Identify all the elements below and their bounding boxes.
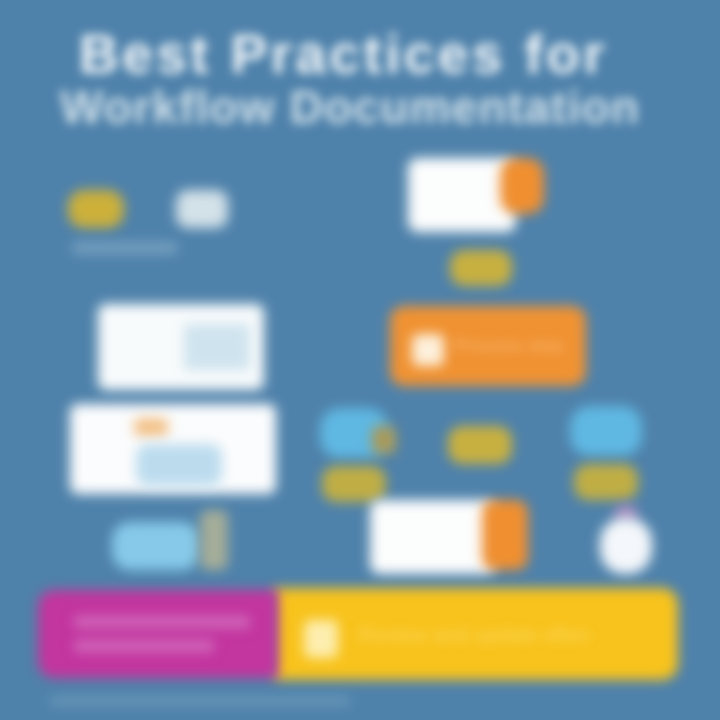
yellow label left — [68, 190, 124, 228]
card body — [98, 304, 264, 390]
icon: person — [591, 498, 661, 582]
title line 2: Workflow Documentation — [60, 81, 640, 133]
magenta text line 2 — [74, 640, 214, 652]
white card upper left — [88, 294, 274, 399]
title — [54, 23, 644, 133]
body — [600, 518, 652, 574]
orange mark — [134, 418, 168, 436]
box fill — [390, 306, 586, 386]
orange process box — [381, 297, 595, 395]
head — [614, 504, 638, 524]
lower process card — [360, 490, 537, 583]
yellow label lower left — [322, 466, 386, 502]
bubble — [112, 522, 200, 570]
yellow connector label top — [450, 250, 512, 286]
yellow panel — [274, 588, 678, 680]
blue bubble left — [320, 408, 388, 458]
figure — [200, 510, 228, 570]
orange tab — [482, 500, 528, 570]
box icon — [412, 334, 444, 366]
blue illustration — [136, 444, 222, 486]
icon: document bubble — [106, 503, 236, 577]
title line 1: Best Practices for — [79, 23, 608, 85]
yellow label lower right — [574, 464, 638, 500]
magenta panel text — [70, 610, 254, 658]
card body — [408, 158, 516, 232]
small tag left — [372, 426, 396, 454]
card tint — [184, 324, 250, 370]
white card lower left — [60, 394, 286, 504]
orange tab — [500, 158, 544, 214]
white label left — [176, 190, 228, 228]
blue bubble right — [570, 406, 642, 456]
magenta panel — [38, 590, 278, 678]
card body — [370, 500, 496, 574]
footer caption — [50, 696, 350, 706]
magenta text line 1 — [74, 616, 250, 628]
box text: Process step — [454, 336, 564, 357]
top process card — [398, 148, 553, 242]
card body — [70, 404, 276, 494]
bottom banner — [30, 578, 688, 690]
yellow panel text: Review and update often — [358, 624, 590, 647]
yellow panel icon — [304, 620, 338, 658]
caption left — [72, 242, 178, 254]
yellow label centre — [448, 426, 512, 464]
